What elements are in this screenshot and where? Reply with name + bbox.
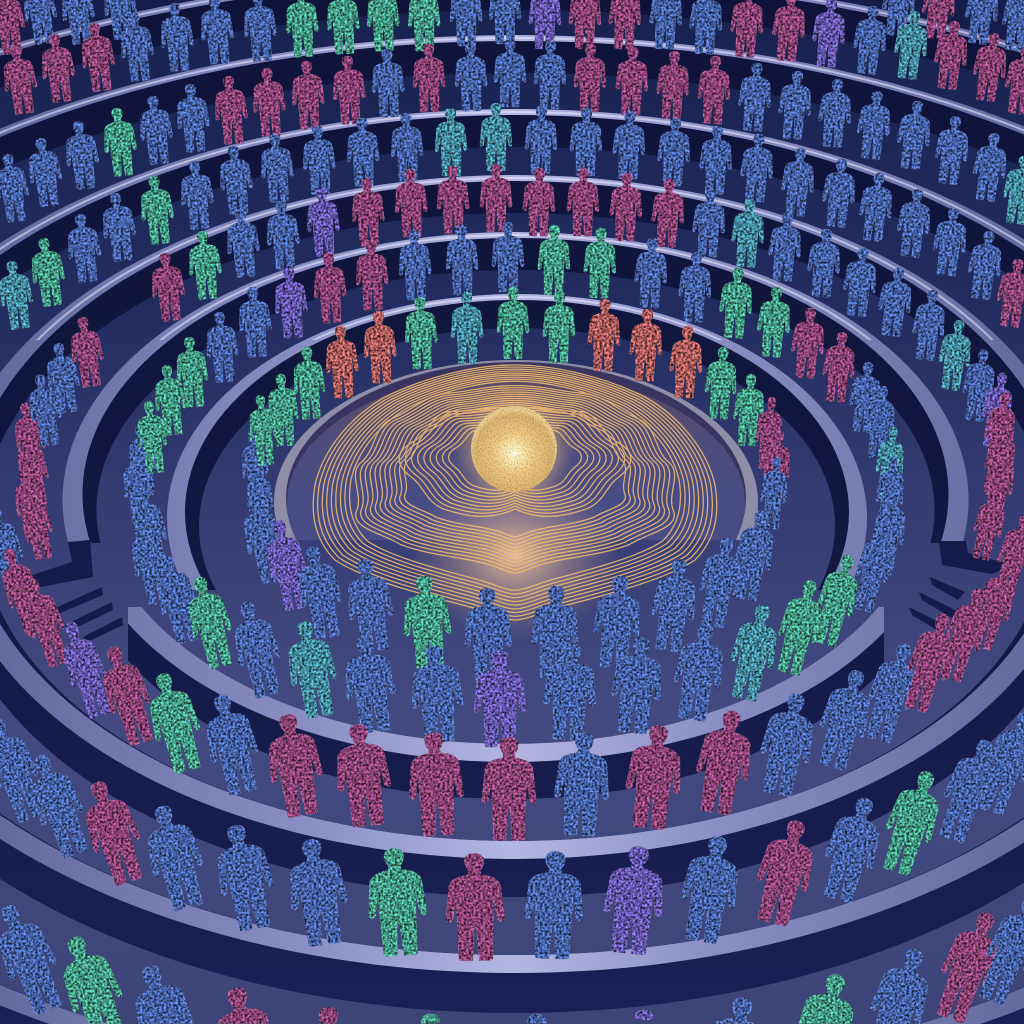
- figures: row four: [0, 103, 1024, 331]
- figures: ring five front row: [0, 889, 1024, 1024]
- glowing sphere: [471, 406, 557, 492]
- figures: top edge row: [0, 0, 1024, 56]
- ring 2: [167, 294, 867, 590]
- golden contour lines: [313, 365, 717, 620]
- ring 1 around pool: [274, 360, 758, 540]
- right stairs: [909, 541, 1012, 632]
- figures: inner arc front row one: [125, 485, 910, 680]
- sphere halo: [454, 389, 574, 509]
- back lip highlights: [0, 0, 1024, 340]
- ring 4: [0, 175, 1024, 897]
- figures: row two: [120, 222, 907, 530]
- figures: ring four front row: [0, 706, 1024, 961]
- ring 3 back arc: [62, 232, 968, 543]
- ring 3 front arc: [128, 607, 884, 799]
- figures: ring three front row: [0, 488, 1024, 840]
- pool floor glow: [410, 470, 620, 640]
- pool warm tint: [287, 372, 745, 634]
- figures: innermost back row: [239, 287, 793, 537]
- figures: row six: [0, 0, 1024, 116]
- left stairs: [30, 540, 123, 642]
- figures: row five: [0, 39, 1024, 226]
- figures: inner arc front row two: [180, 519, 901, 747]
- figures: row three: [10, 164, 1020, 544]
